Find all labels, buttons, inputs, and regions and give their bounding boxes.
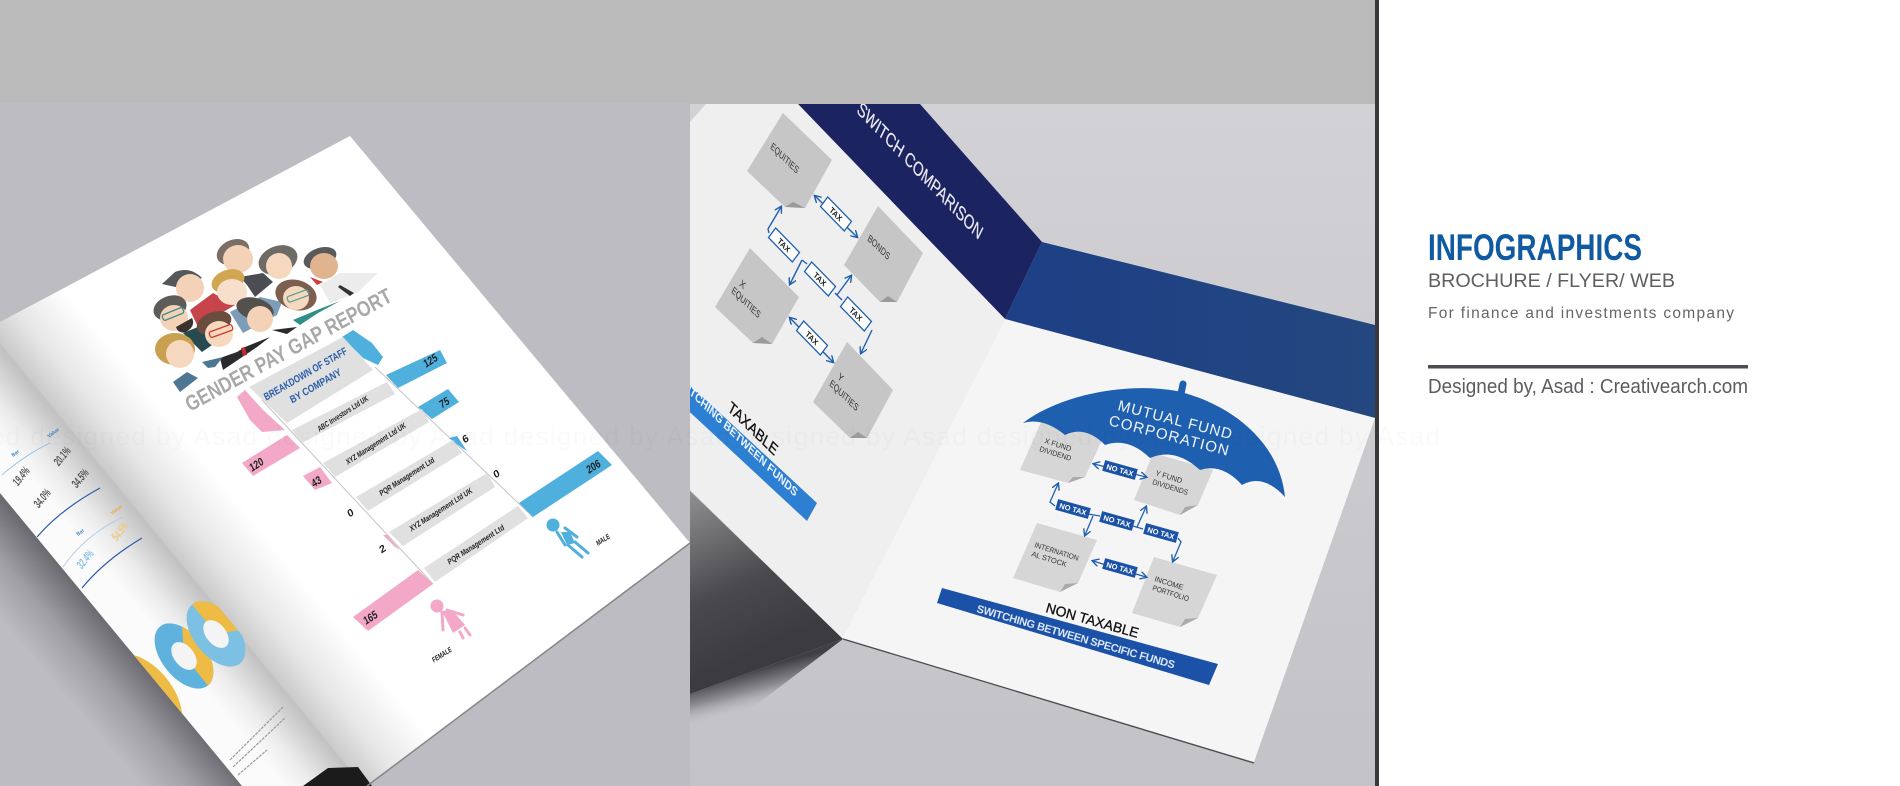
person — [272, 275, 340, 325]
guide line — [375, 367, 533, 517]
table numbers coloured: 32.4% — [74, 546, 96, 572]
tax badge — [804, 262, 836, 296]
chart: staff breakdown by company — [237, 330, 612, 631]
arrows — [768, 196, 872, 362]
photo background — [690, 104, 1375, 786]
table headers: Value — [47, 427, 61, 440]
note: income portfolio: INCOME — [1153, 574, 1185, 592]
row: ABC Investors: ABC Investors Ltd UK — [316, 394, 370, 434]
tax badge: TAX — [828, 205, 844, 224]
page bottom edge — [367, 543, 690, 786]
shadow under left page — [0, 493, 245, 786]
left-hand magazine page — [0, 343, 367, 786]
umbrella heading: CORPORATION — [1107, 412, 1231, 460]
note: bonds: BONDS — [866, 233, 891, 263]
row: XYZ Management — [389, 473, 495, 546]
note: equities: EQUITIES — [769, 141, 800, 177]
rule lines — [2, 443, 142, 588]
panel: project caption — [1428, 227, 1748, 398]
bar female 120: 120 — [248, 455, 266, 475]
table header: BREAKDOWN OF STAFF — [262, 345, 349, 403]
caption client: For finance and investments company — [1428, 305, 1734, 322]
bar male 75 — [418, 389, 459, 419]
umbrella heading: MUTUAL FUND — [1116, 397, 1234, 443]
row: PQR Management — [424, 506, 528, 582]
ribbon: switching between specific funds: SWITCHING BETWEEN SPECIFIC FUNDS — [975, 603, 1176, 672]
ribbon: switching between funds — [690, 385, 817, 521]
shadow under folder — [690, 491, 843, 694]
value male 0: 0 — [492, 467, 502, 481]
note: x fund dividend: DIVIDEND — [1038, 444, 1073, 463]
left page content — [2, 427, 285, 775]
female silhouette — [237, 390, 285, 432]
note: y equities — [813, 342, 893, 438]
heading: taxable: TAXABLE — [725, 398, 780, 460]
panel: magazine photo — [0, 103, 690, 786]
note: bonds — [844, 206, 923, 302]
table numbers: 20.1% — [51, 443, 73, 469]
caption credit: Designed by, Asad : Creativearch.com — [1428, 376, 1748, 398]
person — [193, 307, 270, 370]
note: international stock: INTERNATION — [1033, 540, 1080, 563]
heading: switch comparison: SWITCH COMPARISON — [854, 98, 986, 244]
arrows — [1050, 464, 1181, 577]
icon: male — [546, 518, 588, 557]
diagram: non taxable — [937, 384, 1285, 685]
no tax badge — [1099, 511, 1135, 531]
row: XYZ Management: XYZ Management Ltd UK — [345, 421, 407, 467]
ribbon: switching between funds: SWITCHING BETWEEN FUNDS — [672, 371, 799, 500]
bar male 125: 125 — [422, 351, 440, 371]
photo background — [0, 103, 690, 786]
note: y fund dividends: Y FUND — [1154, 468, 1184, 485]
row: PQR Management — [356, 440, 462, 511]
row: PQR Management: PQR Management Ltd — [378, 456, 436, 498]
caption heading: INFOGRAPHICS — [1428, 227, 1642, 268]
no tax badge: NO TAX — [1102, 513, 1131, 529]
tax badge: TAX — [776, 236, 792, 255]
note: x equities: X — [738, 278, 748, 293]
table numbers: 34.5% — [69, 465, 91, 491]
table numbers: 19.4% — [10, 463, 32, 489]
person — [150, 291, 215, 352]
no tax badge: NO TAX — [1105, 462, 1134, 478]
note: international stock — [1013, 523, 1097, 592]
bar female 43 — [303, 467, 332, 490]
bar male 125 — [386, 350, 447, 388]
person — [213, 234, 273, 297]
table headers: Bar — [76, 528, 86, 538]
note: international stock: AL STOCK — [1030, 549, 1068, 569]
tax badge — [768, 228, 800, 262]
note: x fund dividend — [1020, 420, 1103, 483]
tax badge: TAX — [812, 270, 828, 289]
no tax badge — [1143, 523, 1179, 543]
note: y equities: Y — [836, 371, 846, 386]
bar male 75: 75 — [438, 394, 452, 411]
note: x equities: EQUITIES — [730, 285, 762, 321]
note: x fund dividend: X FUND — [1043, 436, 1073, 453]
donut charts — [134, 601, 246, 714]
bar male 206: 206 — [585, 457, 603, 477]
bar male 6: 6 — [461, 432, 471, 446]
label: male: MALE — [595, 532, 611, 548]
table numbers coloured — [74, 518, 131, 572]
row: PQR Management: PQR Management Ltd — [446, 523, 506, 567]
tax badge: TAX — [804, 329, 820, 348]
caption format: BROCHURE / FLYER/ WEB — [1428, 270, 1675, 292]
bar female 165 — [353, 570, 433, 631]
bar female 2 — [378, 535, 400, 556]
ribbon: switching between specific funds — [937, 588, 1218, 685]
note: x equities — [715, 248, 799, 344]
donut one — [154, 623, 214, 689]
illustration: group of people — [150, 234, 378, 392]
no tax badge — [1055, 499, 1091, 519]
table header: BY COMPANY — [288, 367, 343, 406]
tax badge — [840, 297, 872, 331]
note: income portfolio: PORTFOLIO — [1151, 583, 1190, 603]
spine shadow — [303, 767, 372, 786]
person — [162, 270, 235, 327]
donut two — [186, 601, 246, 667]
bar female 120 — [242, 435, 300, 476]
right inner panel — [842, 319, 1375, 762]
row: ABC Investors — [292, 382, 395, 443]
caption rule — [1428, 365, 1748, 368]
navy flap — [798, 104, 1042, 319]
table numbers coloured: 54.5% — [109, 518, 131, 544]
note: income portfolio — [1132, 557, 1217, 627]
tax badge — [820, 197, 852, 231]
bar female 165: 165 — [362, 608, 380, 628]
panel bottom edge — [843, 639, 1254, 763]
row: XYZ Management: XYZ Management Ltd UK — [408, 486, 474, 533]
note: equities — [747, 113, 832, 208]
table headers: Value — [110, 504, 124, 517]
male silhouette — [342, 330, 383, 365]
heading: non taxable: NON TAXABLE — [1044, 599, 1141, 641]
person — [234, 293, 297, 334]
small print — [230, 707, 285, 775]
right-hand magazine page — [0, 136, 690, 786]
person — [208, 265, 282, 333]
left inner panel — [690, 104, 1005, 638]
diagram: taxable — [672, 113, 923, 521]
table headers: Bar — [11, 449, 21, 459]
tax badge — [796, 321, 828, 355]
tax badge: TAX — [848, 305, 864, 324]
panel: folder photo — [672, 98, 1375, 786]
no tax badge — [1102, 460, 1138, 480]
no tax badge — [1102, 558, 1138, 578]
bar female 43: 43 — [310, 473, 324, 490]
person — [301, 243, 378, 303]
icon: female — [430, 600, 470, 638]
no tax badge: NO TAX — [1105, 560, 1134, 576]
value female 0: 0 — [346, 506, 356, 520]
note: y fund dividends — [1134, 453, 1213, 515]
table numbers: 34.0% — [31, 485, 53, 511]
bar male 206 — [519, 451, 612, 517]
table headers — [11, 427, 124, 538]
row: XYZ Management — [323, 409, 429, 477]
bar female 2: 2 — [378, 542, 388, 556]
note: y equities: EQUITIES — [828, 378, 860, 414]
shadow fade — [690, 639, 843, 755]
person — [254, 240, 302, 280]
guide line — [262, 400, 433, 584]
no tax badge: NO TAX — [1146, 525, 1175, 541]
donut large — [134, 655, 182, 714]
top grey band — [0, 0, 1375, 104]
blue flap — [1005, 242, 1375, 418]
note: y fund dividends: DIVIDENDS — [1151, 477, 1189, 497]
label: female: FEMALE — [431, 645, 453, 665]
no tax badge: NO TAX — [1058, 501, 1087, 517]
watermark: ed designed by Asad designed by Asad designed by Asad designed by Asad designed by Asad designed by Asad — [0, 421, 1440, 451]
icon: umbrella — [1023, 384, 1285, 497]
bar male 6 — [449, 432, 471, 451]
title: gender pay gap report: GENDER PAY GAP REPORT — [181, 283, 396, 416]
table numbers — [10, 443, 91, 511]
person — [155, 333, 223, 392]
vertical divider — [1375, 0, 1379, 786]
table header — [249, 337, 373, 423]
